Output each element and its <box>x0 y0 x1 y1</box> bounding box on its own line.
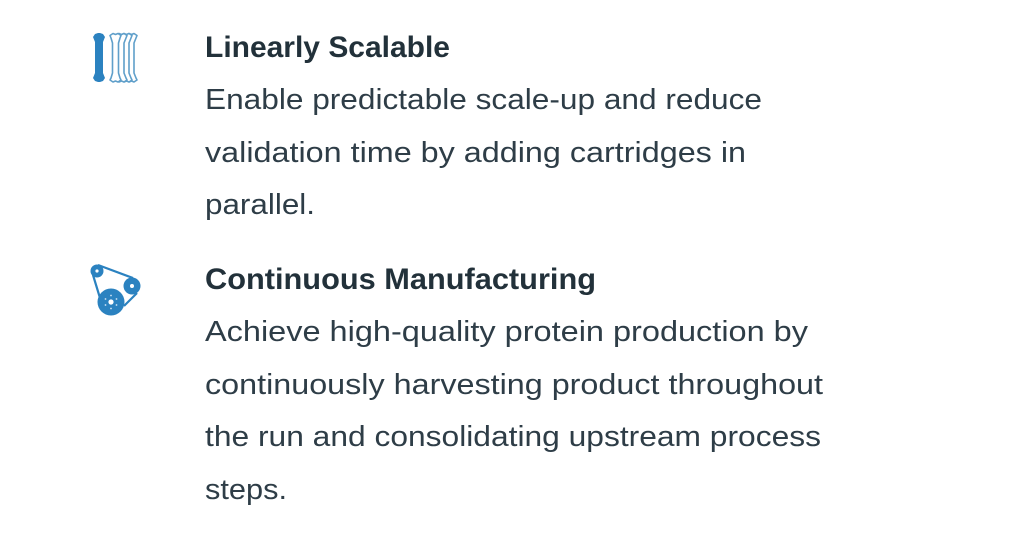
heading: Linearly Scalable: Linearly Scalable <box>205 31 450 64</box>
icon: continuous manufacturing pulleys <box>90 264 140 316</box>
text block: linearly scalable description: validation time by adding cartridges in <box>205 137 746 169</box>
text block: continuous manufacturing description <box>205 316 823 506</box>
text block: continuous manufacturing description: continuously harvesting product throughout <box>205 369 823 401</box>
text block: linearly scalable description: Enable predictable scale-up and reduce <box>205 84 762 116</box>
text block: continuous manufacturing description: steps. <box>205 474 287 506</box>
text block: continuous manufacturing description: Achieve high-quality protein production by <box>205 316 809 348</box>
text block: continuous manufacturing description: the run and consolidating upstream process <box>205 421 821 453</box>
text block: linearly scalable description: parallel. <box>205 189 315 221</box>
heading: Continuous Manufacturing: Continuous Manufacturing <box>205 263 596 296</box>
icon: linearly scalable cartridges <box>93 33 137 82</box>
text block: linearly scalable description <box>205 84 762 221</box>
